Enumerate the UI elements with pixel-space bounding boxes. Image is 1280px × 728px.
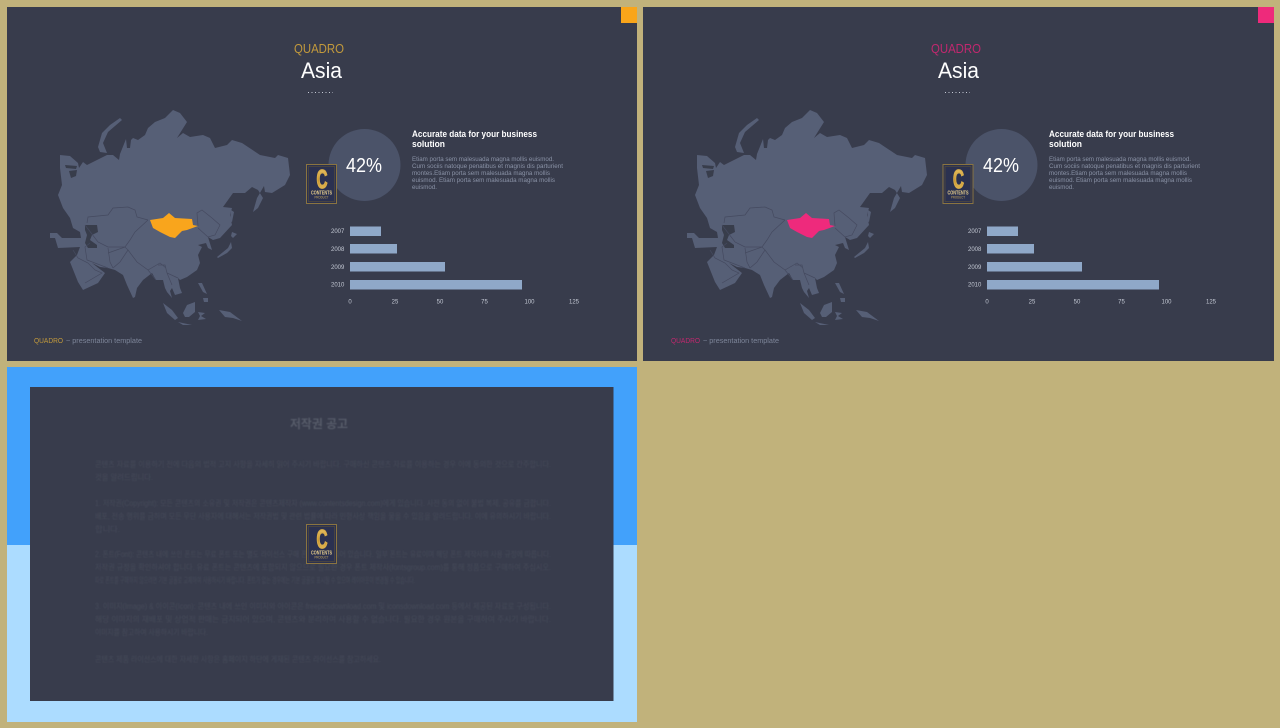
bar chart: 0 <box>348 300 352 306</box>
text block: montes.Etiam porta sem malesuada magna mollis <box>412 170 551 177</box>
logo <box>306 524 336 564</box>
footer: ~ presentation template <box>66 338 142 345</box>
logo: CONTENTS <box>311 190 333 196</box>
text block: Cum sociis natoque penatibus et magnis dis parturient <box>1049 163 1200 170</box>
copyright body text: 저작권 규정을 확인하셔야 합니다. 유료 폰트는 콘텐츠에 포함되지 않으므로 필요한 경우 폰트 제작사(fontsgroup.com)를 통해 정품으로 구매하여 주십시오. <box>95 562 551 572</box>
bar chart: 25 <box>392 300 399 306</box>
logo: CONTENTS <box>311 550 333 556</box>
copyright body text: 콘텐츠 자료를 이용하기 전에 다음의 법적 고지 사항을 자세히 읽어 주시기 바랍니다. 구매하신 콘텐츠 자료를 이용하는 경우 이에 동의한 것으로 간주합니다. <box>95 459 551 469</box>
text block: Accurate data for your business <box>1049 129 1174 139</box>
text block: Etiam porta sem malesuada magna mollis euismod. <box>1049 156 1191 163</box>
stat circle 42%: 42% <box>983 155 1019 177</box>
copyright body text: 따로 폰트를 구매하지 않으려면 기본 글꼴로 교체하여 사용하시기 바랍니다. 폰트가 없는 경우에는 기본 글꼴로 표시될 수 있으며 레이아웃이 변경될 수 있습니다. <box>95 575 415 585</box>
bar chart: 0 <box>985 300 989 306</box>
corner accent: pink <box>1258 7 1274 23</box>
stat circle 42%: 42% <box>346 155 382 177</box>
bar chart: 2009 <box>331 265 345 271</box>
bar chart: 2008 <box>968 247 982 253</box>
logo: C <box>316 524 328 554</box>
bar chart: 100 <box>1161 300 1172 306</box>
heading: Asia <box>938 58 980 83</box>
footer <box>671 338 779 345</box>
footer: QUADRO <box>34 338 64 345</box>
panel: copyright notice slide <box>7 367 637 722</box>
bar chart: 2008 <box>331 247 345 253</box>
bar chart: 125 <box>1206 300 1217 306</box>
footer: QUADRO <box>671 338 701 345</box>
copyright body text <box>95 459 551 664</box>
copyright body text: 2. 폰트(Font): 콘텐츠 내에 쓰인 폰트는 무료 폰트 또는 별도 라이선스 구매 폰트로 구성되어 있습니다. 일부 폰트는 유료이며 해당 폰트 제작사의 사용 규정에 따릅니다. <box>95 549 551 559</box>
text block: euismod. <box>1049 184 1074 191</box>
text block: montes.Etiam porta sem malesuada magna mollis <box>1049 170 1188 177</box>
logo <box>943 164 973 204</box>
bar chart: 2007 <box>331 229 345 235</box>
brand label: QUADRO <box>931 42 981 56</box>
heading: Asia <box>301 58 343 83</box>
copyright body text: 이미지를 참고하여 사용하시기 바랍니다. <box>95 627 208 637</box>
bar chart: 25 <box>1029 300 1036 306</box>
logo: CONTENTS <box>948 190 969 196</box>
bar chart <box>331 226 580 306</box>
text block <box>412 129 563 191</box>
bar chart <box>968 226 1217 306</box>
logo: PRODUCT <box>314 556 329 560</box>
footer <box>34 338 142 345</box>
stat circle 42% <box>328 129 400 201</box>
panel: pink slide <box>643 7 1274 361</box>
bar chart: 2009 <box>968 265 982 271</box>
logo <box>306 164 336 204</box>
text block: euismod. Etiam porta sem malesuada magna mollis <box>1049 177 1193 184</box>
copyright body text: 1. 저작권(Copyright): 모든 콘텐츠의 소유권 및 저작권은 콘텐츠제작자 (www.contentsdesign.com)에게 있습니다. 사전 동의 없이 불법 복제, 공유를 금합니다. <box>95 498 551 508</box>
text block: Cum sociis natoque penatibus et magnis dis parturient <box>412 163 563 170</box>
panel: orange slide <box>7 7 637 361</box>
bar chart: 125 <box>569 300 580 306</box>
text block: Accurate data for your business <box>412 129 537 139</box>
copyright body text: 해당 이미지의 재배포 및 상업적 판매는 금지되어 있으며, 콘텐츠와 분리하여 사용할 수 없습니다. 필요한 경우 원본을 구매하여 주시기 바랍니다. <box>95 614 551 624</box>
corner accent: orange <box>621 7 637 23</box>
text block: euismod. Etiam porta sem malesuada magna mollis <box>412 177 556 184</box>
map: Asia with Mongolia highlighted <box>687 110 927 325</box>
text block <box>1049 129 1200 191</box>
text block: solution <box>412 139 445 149</box>
copyright body text: 것을 알려드립니다. <box>95 472 153 482</box>
copyright heading: 저작권 공고 <box>290 416 348 431</box>
copyright body text: 콘텐츠 제품 라이선스에 대한 자세한 사항은 홈페이지 하단에 게재된 콘텐츠 라이선스를 참고하세요. <box>95 654 381 664</box>
text block: solution <box>1049 139 1082 149</box>
brand label: QUADRO <box>294 42 344 56</box>
footer: ~ presentation template <box>703 338 779 345</box>
bar chart: 2010 <box>968 282 982 288</box>
text block: euismod. <box>412 184 437 191</box>
bar chart: 75 <box>481 300 488 306</box>
logo: PRODUCT <box>314 196 329 200</box>
bar chart: 2010 <box>331 282 345 288</box>
bar chart: 2007 <box>968 229 982 235</box>
bar chart: 75 <box>1118 300 1125 306</box>
copyright body text: 3. 이미지(Image) & 아이콘(Icon): 콘텐츠 내에 쓰인 이미지와 아이콘은 freepicsdownload.com 및 iconsdownload.com 등에서 제공된 자료로 구성됩니다. <box>95 601 551 611</box>
logo: PRODUCT <box>951 196 966 200</box>
bar chart: 50 <box>1074 300 1081 306</box>
logo: C <box>953 164 964 194</box>
bar chart: 50 <box>437 300 444 306</box>
bar chart: 100 <box>524 300 535 306</box>
copyright body text: 배포, 전송 행위를 금하며 모든 무단 사용자에 대해서는 저작권법 및 관련 법률에 따라 민형사상 책임을 물을 수 있음을 알려드립니다. 이에 유의하시기 바랍니다. <box>95 511 551 521</box>
copyright body text: 합니다. <box>95 524 120 534</box>
logo: C <box>316 164 328 194</box>
text block: Etiam porta sem malesuada magna mollis euismod. <box>412 156 554 163</box>
map: Asia with Mongolia highlighted <box>50 110 290 325</box>
stat circle 42% <box>966 129 1038 201</box>
